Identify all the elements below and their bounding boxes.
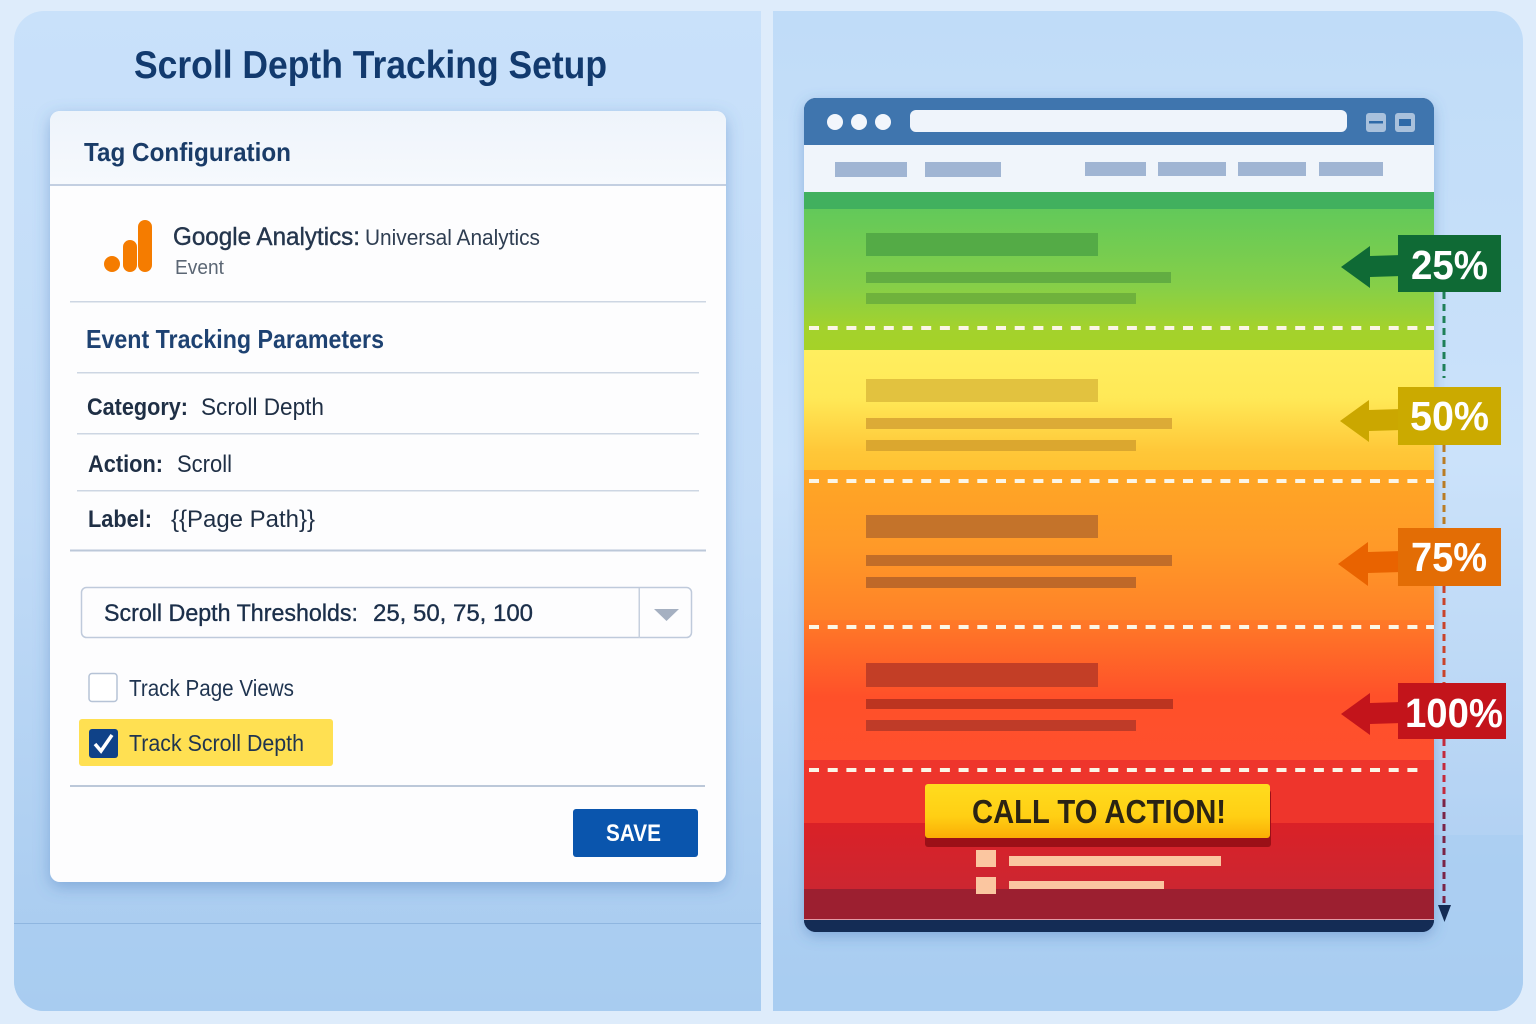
scroll depth vertical dashed arrow bbox=[1438, 292, 1451, 922]
field: label: Label: bbox=[88, 506, 152, 533]
scroll threshold dashed lines bbox=[809, 328, 1434, 770]
heat band: red-orange bbox=[804, 620, 1434, 760]
tag type text: Google Analytics: bbox=[173, 223, 360, 251]
tag type text: Universal Analytics bbox=[365, 225, 540, 250]
marker: 100%: 100% bbox=[1405, 690, 1503, 736]
field: action bbox=[88, 451, 232, 478]
heat band: red, bottom of page bbox=[804, 760, 1434, 932]
heat band: orange bbox=[804, 470, 1434, 620]
card header bbox=[50, 111, 726, 186]
dropdown: scroll depth thresholds: Scroll Depth Thresholds: bbox=[104, 600, 358, 627]
right background panel bbox=[773, 11, 1523, 1011]
icon: analytics bars bbox=[104, 220, 152, 272]
field: label bbox=[88, 506, 315, 533]
marker: 50%: 50% bbox=[1410, 393, 1489, 439]
footer content placeholders bbox=[976, 850, 1221, 894]
checkbox: track scroll depth highlighted bbox=[79, 719, 333, 766]
field: category: Scroll Depth bbox=[201, 394, 324, 421]
call to action button: CALL TO ACTION! bbox=[972, 793, 1226, 830]
marker: 75%: 75% bbox=[1411, 534, 1487, 580]
card header: Tag Configuration bbox=[84, 137, 291, 167]
checkbox: track page views: Track Page Views bbox=[129, 675, 294, 701]
tag type text: Event bbox=[175, 257, 224, 279]
dropdown: scroll depth thresholds bbox=[82, 588, 692, 638]
marker: 75% bbox=[1338, 528, 1501, 586]
browser title bar bbox=[804, 98, 1434, 145]
heading: event tracking parameters: Event Tracking Parameters bbox=[86, 324, 384, 354]
call to action button bbox=[925, 784, 1271, 847]
marker: 25%: 25% bbox=[1411, 242, 1488, 288]
dropdown: scroll depth thresholds: 25, 50, 75, 100 bbox=[373, 600, 533, 627]
checkbox: track scroll depth highlighted: Track Scroll Depth bbox=[129, 730, 304, 756]
field: action: Scroll bbox=[177, 451, 232, 478]
field: action: Action: bbox=[88, 451, 163, 478]
checkbox: track page views bbox=[89, 674, 294, 702]
marker: 100% bbox=[1341, 683, 1506, 739]
marker: 50% bbox=[1340, 387, 1501, 445]
browser window mockup bbox=[804, 98, 1434, 932]
tag type text bbox=[173, 223, 540, 279]
page navigation bar bbox=[804, 145, 1434, 192]
heat band: yellow bbox=[804, 350, 1434, 470]
field: category: Category: bbox=[87, 394, 188, 421]
panel: tag configuration card bbox=[50, 111, 726, 882]
field: category bbox=[87, 394, 324, 421]
title: Scroll Depth Tracking Setup bbox=[134, 44, 607, 87]
save button bbox=[573, 809, 698, 857]
save button: SAVE bbox=[606, 820, 661, 847]
marker: 25% bbox=[1341, 235, 1501, 292]
field: label: {{Page Path}} bbox=[171, 506, 315, 533]
left background panel bbox=[14, 11, 761, 1011]
heat band: green, top of page bbox=[804, 192, 1434, 350]
